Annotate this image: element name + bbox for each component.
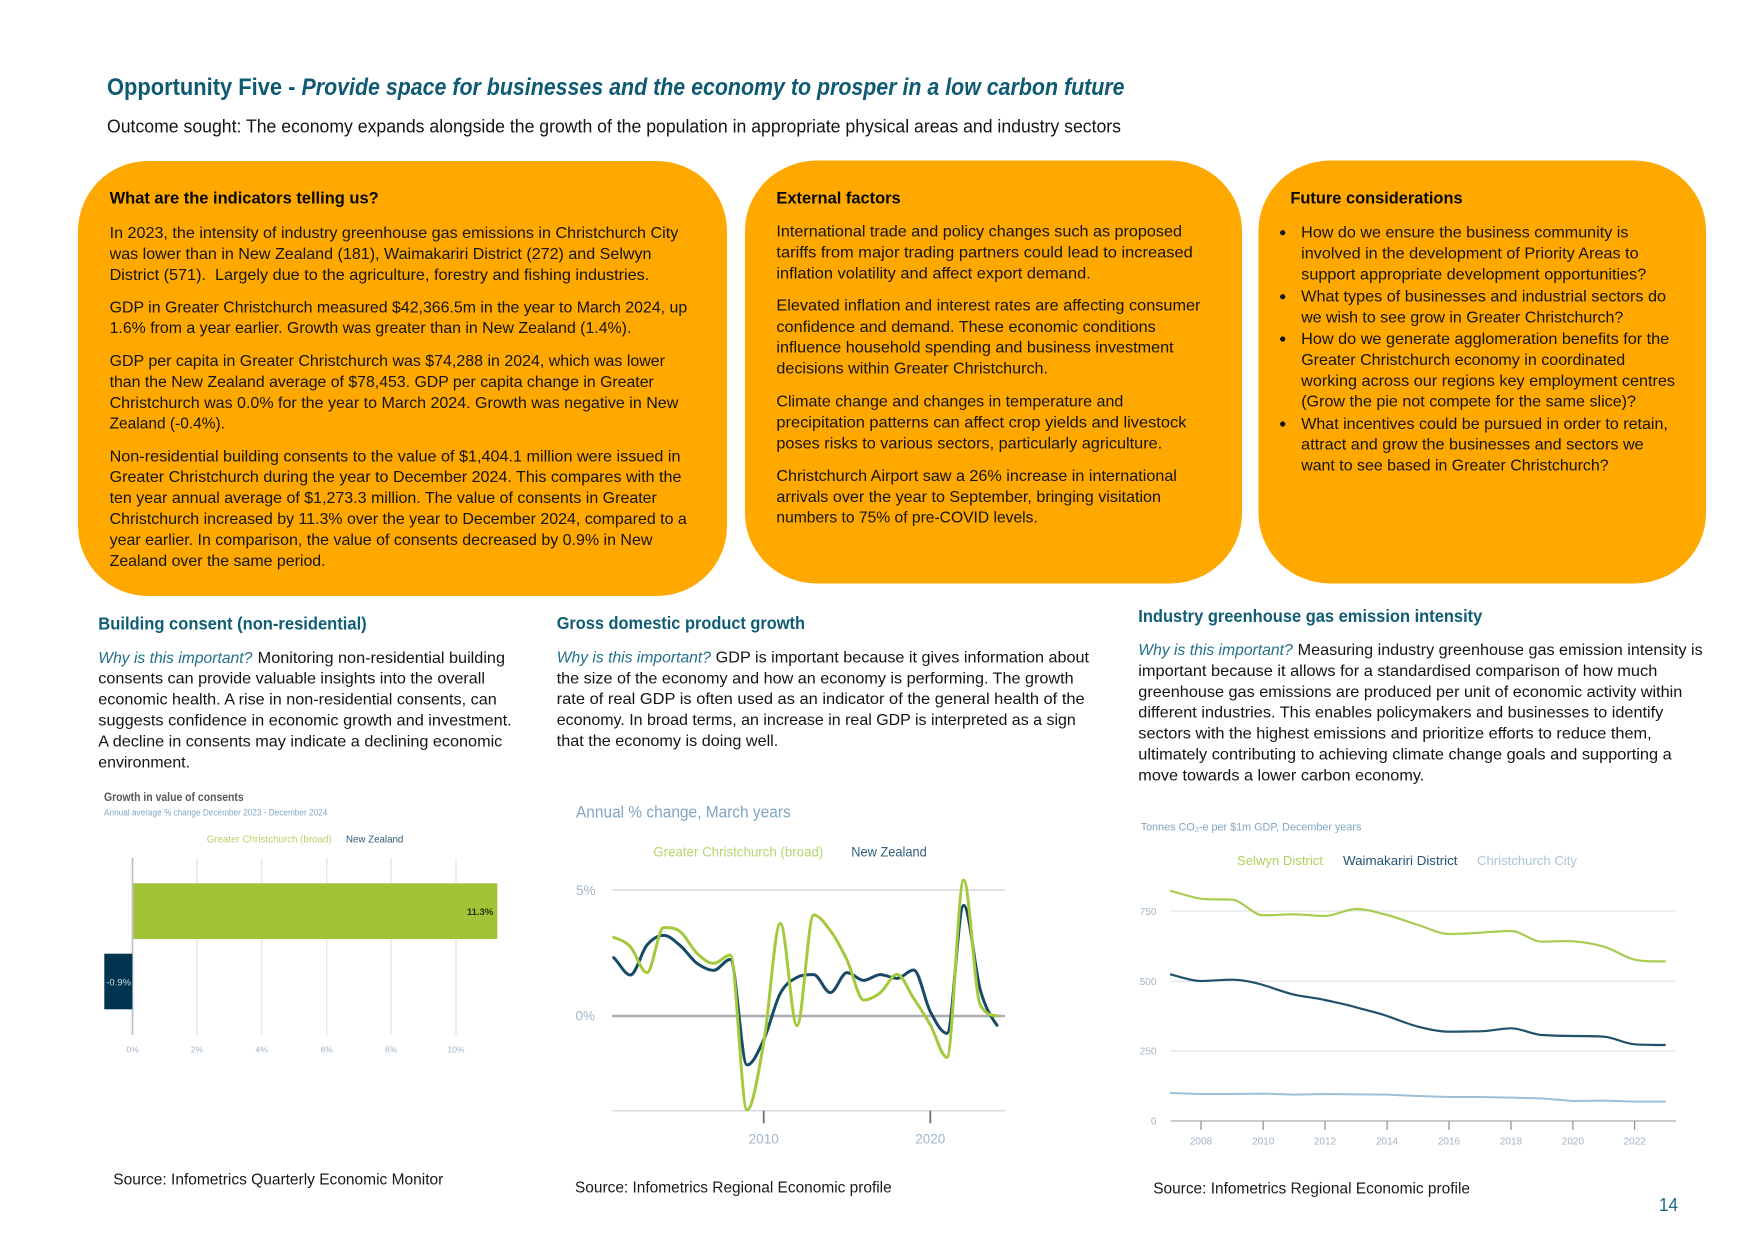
x axis labels bbox=[1190, 1137, 1646, 1148]
text: GDP per capita: GDP per capita in Greater Christchurch was $74,288 in 2024, which was lower bbox=[110, 353, 666, 370]
bar: New Zealand -0.9% bbox=[104, 954, 132, 1009]
text: GDP: 1.6% from a year earlier. Growth was greater than in New Zealand (1.4%). bbox=[110, 320, 631, 337]
x axis labels: 2008 bbox=[1190, 1137, 1213, 1148]
text: inflation: Elevated inflation and interest rates are affecting consumer bbox=[776, 298, 1201, 315]
chart title: Annual % change, March years bbox=[576, 803, 791, 821]
panel: external factors bbox=[745, 160, 1242, 584]
text: building consents: Non-residential building consents to the value of $1,404.1 million were issued in bbox=[110, 448, 681, 465]
x axis labels: 4% bbox=[256, 1045, 268, 1055]
text: GDP: GDP in Greater Christchurch measured $42,366.5m in the year to March 2024, up bbox=[110, 300, 687, 316]
text: climate: Climate change and changes in temperature and bbox=[776, 393, 1123, 410]
bullet: priority areas: support appropriate development opportunities? bbox=[1301, 266, 1646, 283]
text: building consent importance: consents can provide valuable insights into the overall bbox=[98, 671, 485, 688]
bullet: business types: What types of businesses and industrial sectors do bbox=[1301, 289, 1666, 306]
text: airport: numbers to 75% of pre-COVID levels. bbox=[776, 510, 1038, 527]
bullet: agglomeration: working across our regions key employment centres bbox=[1300, 373, 1675, 390]
line: Waimakariri District bbox=[1170, 974, 1666, 1045]
text: GDP per capita: Christchurch was 0.0% for the year to March 2024. Growth was negative in New bbox=[110, 395, 679, 412]
line: Christchurch City bbox=[1170, 1093, 1666, 1102]
heading: emission intensity: Industry greenhouse gas emission intensity bbox=[1138, 606, 1483, 626]
text: building consents: Greater Christchurch during the year to December 2024. This compares with the bbox=[110, 469, 682, 486]
x axis labels: 10% bbox=[447, 1045, 465, 1055]
chart: GDP annual change bbox=[576, 803, 1005, 1146]
y axis labels: 500 bbox=[1140, 977, 1157, 988]
text: emission intensity importance: move towards a lower carbon economy. bbox=[1138, 767, 1424, 784]
title: Provide space for businesses and the economy to prosper in a low carbon future bbox=[302, 74, 1124, 101]
text: emissions intensity bbox=[109, 225, 678, 284]
source: consents: Source: Infometrics Quarterly Economic Monitor bbox=[113, 1171, 443, 1188]
bullet: business types: we wish to see grow in Greater Christchurch? bbox=[1300, 309, 1623, 326]
x axis labels: 8% bbox=[385, 1045, 398, 1055]
heading: external factors: External factors bbox=[776, 188, 901, 207]
text: trade: tariffs from major trading partners could lead to increased bbox=[776, 244, 1193, 261]
bar: Greater Christchurch 11.3% bbox=[133, 883, 497, 939]
line: Greater Christchurch bbox=[614, 880, 997, 1110]
text: airport: arrivals over the year to September, bringing visitation bbox=[776, 489, 1161, 506]
x axis labels: 2022 bbox=[1623, 1137, 1646, 1148]
bullet: incentives: want to see based in Greater Christchurch? bbox=[1300, 457, 1609, 474]
text: emission intensity importance: important because it allows for a standardised comparison of how much bbox=[1138, 663, 1657, 680]
text: climate bbox=[776, 393, 1187, 452]
text: GDP per capita: than the New Zealand average of $78,453. GDP per capita change in Greater bbox=[110, 374, 654, 391]
y axis labels: 750 bbox=[1140, 907, 1157, 918]
legend: Christchurch City bbox=[1477, 853, 1578, 868]
panel: indicators bbox=[78, 161, 727, 596]
legend: Waimakariri District bbox=[1343, 853, 1458, 868]
bullet: incentives: What incentives could be pursued in order to retain, bbox=[1301, 416, 1668, 433]
text: emissions intensity: District (571). Largely due to the agriculture, forestry and fishing industries. bbox=[110, 267, 649, 284]
panel: future considerations bbox=[1258, 160, 1706, 584]
chart title: Growth in value of consents bbox=[104, 792, 244, 804]
text: trade bbox=[776, 224, 1193, 282]
legend bbox=[653, 844, 927, 860]
text: building consents bbox=[110, 448, 687, 570]
text: emission intensity importance: different industries. This enables policymakers and businesses to identify bbox=[1138, 705, 1663, 722]
title: Opportunity Five - bbox=[107, 74, 302, 101]
text: emission intensity importance: ultimately contributing to achieving climate change goals and supporting a bbox=[1138, 747, 1672, 764]
text: GDP importance: rate of real GDP is often used as an indicator of the general health of the bbox=[557, 691, 1085, 708]
text: GDP importance bbox=[557, 649, 1090, 750]
bar: New Zealand -0.9%: -0.9% bbox=[106, 977, 132, 988]
bullet: agglomeration: Greater Christchurch economy in coordinated bbox=[1301, 352, 1625, 369]
axis labels: 5% bbox=[576, 883, 596, 898]
legend: Greater Christchurch (broad) bbox=[207, 834, 332, 846]
legend: Greater Christchurch (broad) bbox=[653, 844, 823, 860]
axis labels: 2020 bbox=[915, 1131, 945, 1146]
text: building consent importance: A decline in consents may indicate a declining economic bbox=[98, 733, 502, 750]
x axis labels: 2012 bbox=[1314, 1137, 1337, 1148]
text: climate: poses risks to various sectors, particularly agriculture. bbox=[776, 435, 1162, 452]
text: building consent importance bbox=[98, 650, 512, 771]
bullet: incentives: attract and grow the businesses and sectors we bbox=[1301, 437, 1644, 454]
x axis labels: 2016 bbox=[1438, 1137, 1461, 1148]
text: trade: inflation volatility and affect export demand. bbox=[776, 265, 1091, 282]
x axis labels: 2014 bbox=[1376, 1137, 1399, 1148]
bullet: priority areas bbox=[1280, 225, 1646, 283]
axis labels: 2010 bbox=[749, 1131, 779, 1146]
legend bbox=[1237, 853, 1578, 868]
text: emission intensity importance: sectors with the highest emissions and prioritize efforts to reduce them, bbox=[1138, 726, 1652, 743]
outcome sought text: Outcome sought: The economy expands alongside the growth of the population in appropriate physical areas and industry sectors bbox=[107, 116, 1121, 136]
line: New Zealand bbox=[614, 905, 997, 1065]
legend: New Zealand bbox=[346, 834, 403, 846]
bullet: agglomeration bbox=[1280, 331, 1675, 411]
heading: building consent: Building consent (non-residential) bbox=[98, 613, 367, 633]
axis labels bbox=[576, 883, 945, 1146]
source: GDP: Source: Infometrics Regional Economic profile bbox=[575, 1180, 892, 1197]
legend bbox=[207, 834, 403, 846]
text: emission intensity importance: Measuring industry greenhouse gas emission intensity is bbox=[1298, 642, 1703, 659]
text: building consent importance: Why is this important? bbox=[98, 650, 252, 667]
bullet: agglomeration: (Grow the pie not compete for the same slice)? bbox=[1301, 394, 1636, 411]
text: building consents: year earlier. In comparison, the value of consents decreased by 0.9% in New bbox=[110, 532, 653, 549]
x axis labels: 2010 bbox=[1252, 1137, 1275, 1148]
axis labels: 0% bbox=[576, 1008, 595, 1024]
text: emissions intensity: In 2023, the intensity of industry greenhouse gas emissions in Christchurch City bbox=[110, 225, 678, 242]
legend: New Zealand bbox=[851, 844, 927, 860]
y axis labels bbox=[1140, 907, 1157, 1128]
text: emissions intensity: was lower than in New Zealand (181), Waimakariri District (272) and Selwyn bbox=[109, 246, 651, 263]
text: GDP importance: the size of the economy and how an economy is performing. The growth bbox=[557, 670, 1074, 687]
bullet: business types bbox=[1280, 289, 1666, 326]
y axis labels: 250 bbox=[1140, 1046, 1157, 1058]
text: GDP importance: that the economy is doing well. bbox=[557, 733, 778, 750]
text: inflation: confidence and demand. These economic conditions bbox=[776, 319, 1156, 336]
chart: growth in value of consents bbox=[104, 792, 497, 1055]
text: GDP importance: GDP is important because it gives information about bbox=[716, 649, 1090, 666]
chart: emission intensity bbox=[1140, 822, 1676, 1148]
x axis labels: 2018 bbox=[1500, 1137, 1523, 1148]
text: building consents: Zealand over the same period. bbox=[110, 553, 326, 570]
x axis labels: 2% bbox=[191, 1045, 204, 1055]
text: GDP per capita: Zealand (-0.4%). bbox=[110, 416, 225, 433]
text: building consent importance: Monitoring non-residential building bbox=[258, 650, 505, 667]
text: emission intensity importance: Why is this important? bbox=[1138, 642, 1293, 659]
text: building consent importance: economic health. A rise in non-residential consents, can bbox=[98, 692, 497, 709]
heading: future considerations: Future considerations bbox=[1290, 188, 1463, 207]
bullet: priority areas: involved in the development of Priority Areas to bbox=[1301, 245, 1639, 262]
chart title: Tonnes CO₂-e per $1m GDP, December years bbox=[1141, 822, 1362, 834]
page number: 14 bbox=[1659, 1195, 1678, 1215]
x axis labels bbox=[126, 1045, 465, 1055]
heading: indicators: What are the indicators telling us? bbox=[110, 188, 379, 208]
text: emission intensity importance bbox=[1138, 642, 1703, 784]
source: emissions: Source: Infometrics Regional Economic profile bbox=[1153, 1180, 1470, 1197]
x axis labels: 0% bbox=[126, 1045, 139, 1055]
text: building consent importance: suggests confidence in economic growth and investment. bbox=[98, 712, 512, 729]
text: airport: Christchurch Airport saw a 26% increase in international bbox=[776, 468, 1177, 485]
text: GDP bbox=[110, 300, 687, 337]
bar: Greater Christchurch 11.3%: 11.3% bbox=[467, 907, 494, 918]
text: building consent importance: environment. bbox=[98, 754, 190, 771]
y axis labels: 0 bbox=[1151, 1116, 1157, 1128]
text: inflation bbox=[776, 298, 1201, 378]
text: GDP importance: Why is this important? bbox=[557, 649, 711, 666]
x axis labels: 2020 bbox=[1562, 1137, 1584, 1148]
text: inflation: influence household spending and business investment bbox=[776, 340, 1174, 357]
x axis labels: 6% bbox=[321, 1045, 333, 1055]
text: building consents: Christchurch increased by 11.3% over the year to December 2024, compared to a bbox=[110, 511, 687, 528]
text: climate: precipitation patterns can affect crop yields and livestock bbox=[776, 415, 1187, 432]
bullet: priority areas: How do we ensure the business community is bbox=[1301, 225, 1628, 242]
legend: Selwyn District bbox=[1237, 853, 1323, 868]
bullet: agglomeration: How do we generate agglomeration benefits for the bbox=[1301, 331, 1669, 348]
text: airport bbox=[776, 468, 1177, 527]
chart subtitle: Annual average % change December 2023 - December 2024 bbox=[104, 808, 327, 819]
text: trade: International trade and policy changes such as proposed bbox=[776, 224, 1182, 241]
text: emission intensity importance: greenhouse gas emissions are produced per unit of economic activity within bbox=[1138, 684, 1682, 701]
text: GDP importance: economy. In broad terms, an increase in real GDP is interpreted as a sign bbox=[557, 712, 1076, 729]
text: GDP per capita bbox=[110, 353, 679, 433]
heading: GDP growth: Gross domestic product growth bbox=[557, 613, 805, 633]
bullet: incentives bbox=[1280, 416, 1668, 474]
line: Selwyn District bbox=[1170, 891, 1666, 961]
text: inflation: decisions within Greater Christchurch. bbox=[776, 361, 1048, 378]
text: building consents: ten year annual average of $1,273.3 million. The value of consents in Greater bbox=[110, 490, 658, 507]
